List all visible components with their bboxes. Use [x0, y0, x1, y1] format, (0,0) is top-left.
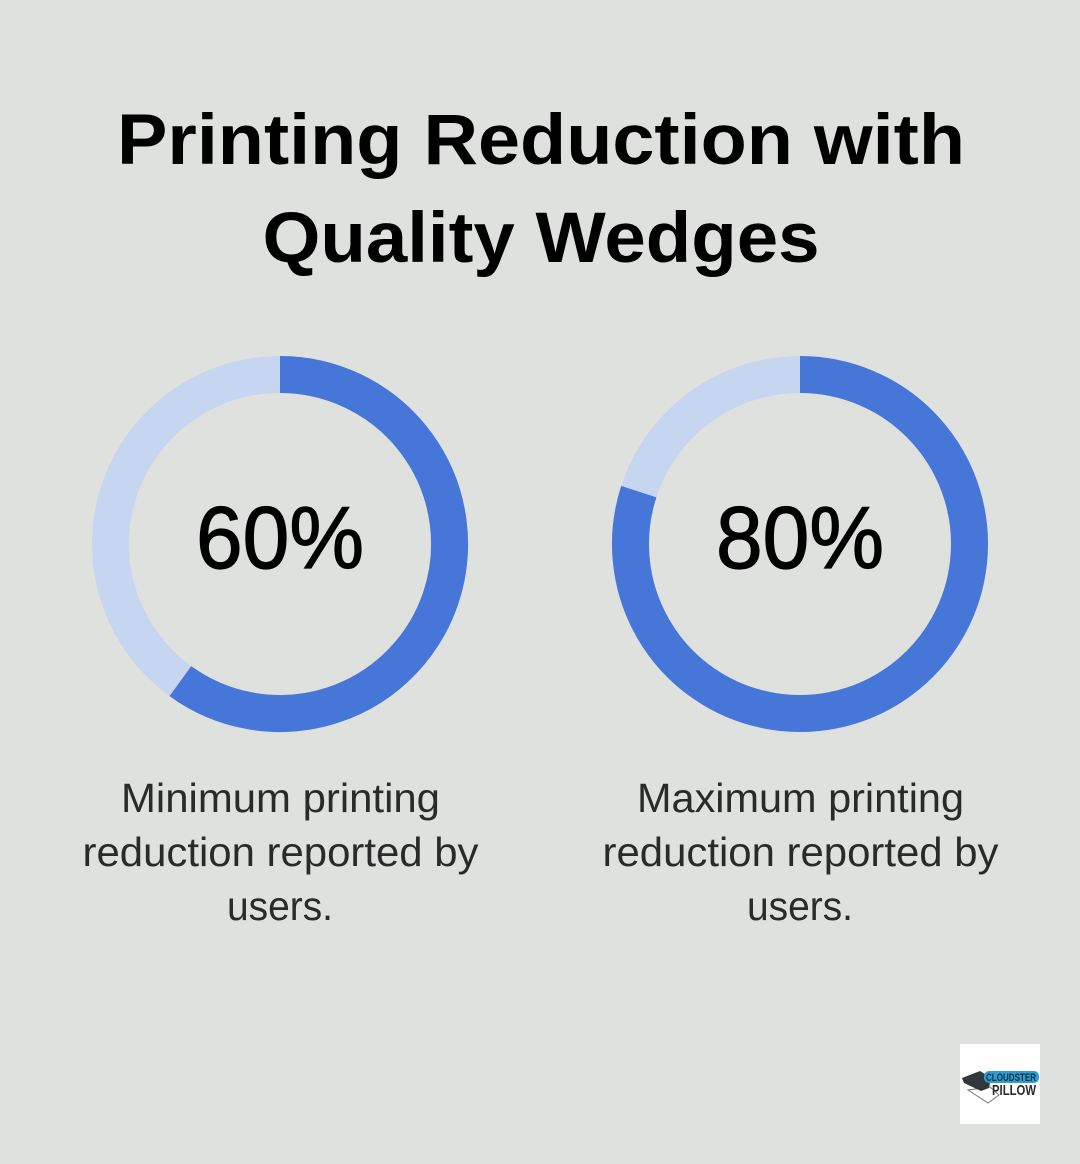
- title: [117, 101, 965, 278]
- logo: Cloudster Pillow: [960, 1044, 1040, 1124]
- donut chart: 60%: 60%: [196, 488, 364, 587]
- logo: Cloudster Pillow: PILLOW: [992, 1082, 1037, 1099]
- caption: minimum: reduction reported by: [82, 829, 479, 875]
- caption: minimum: Minimum printing: [121, 775, 440, 821]
- caption: maximum: Maximum printing: [637, 775, 964, 821]
- caption: maximum: reduction reported by: [602, 829, 999, 875]
- donut chart: 60%: [110, 374, 450, 714]
- donut chart: 80%: [630, 374, 970, 714]
- caption: maximum: users.: [747, 883, 853, 929]
- caption: minimum: [82, 775, 479, 929]
- donut chart: 80%: 80%: [716, 488, 884, 587]
- title: Printing Reduction with: [117, 101, 965, 180]
- title: Quality Wedges: [262, 199, 820, 278]
- caption: minimum: users.: [227, 883, 333, 929]
- panel: maximum reduction: [602, 374, 999, 929]
- logo: Cloudster Pillow: CLOUDSTER: [986, 1072, 1036, 1084]
- panel: minimum reduction: [82, 374, 479, 929]
- caption: maximum: [602, 775, 999, 929]
